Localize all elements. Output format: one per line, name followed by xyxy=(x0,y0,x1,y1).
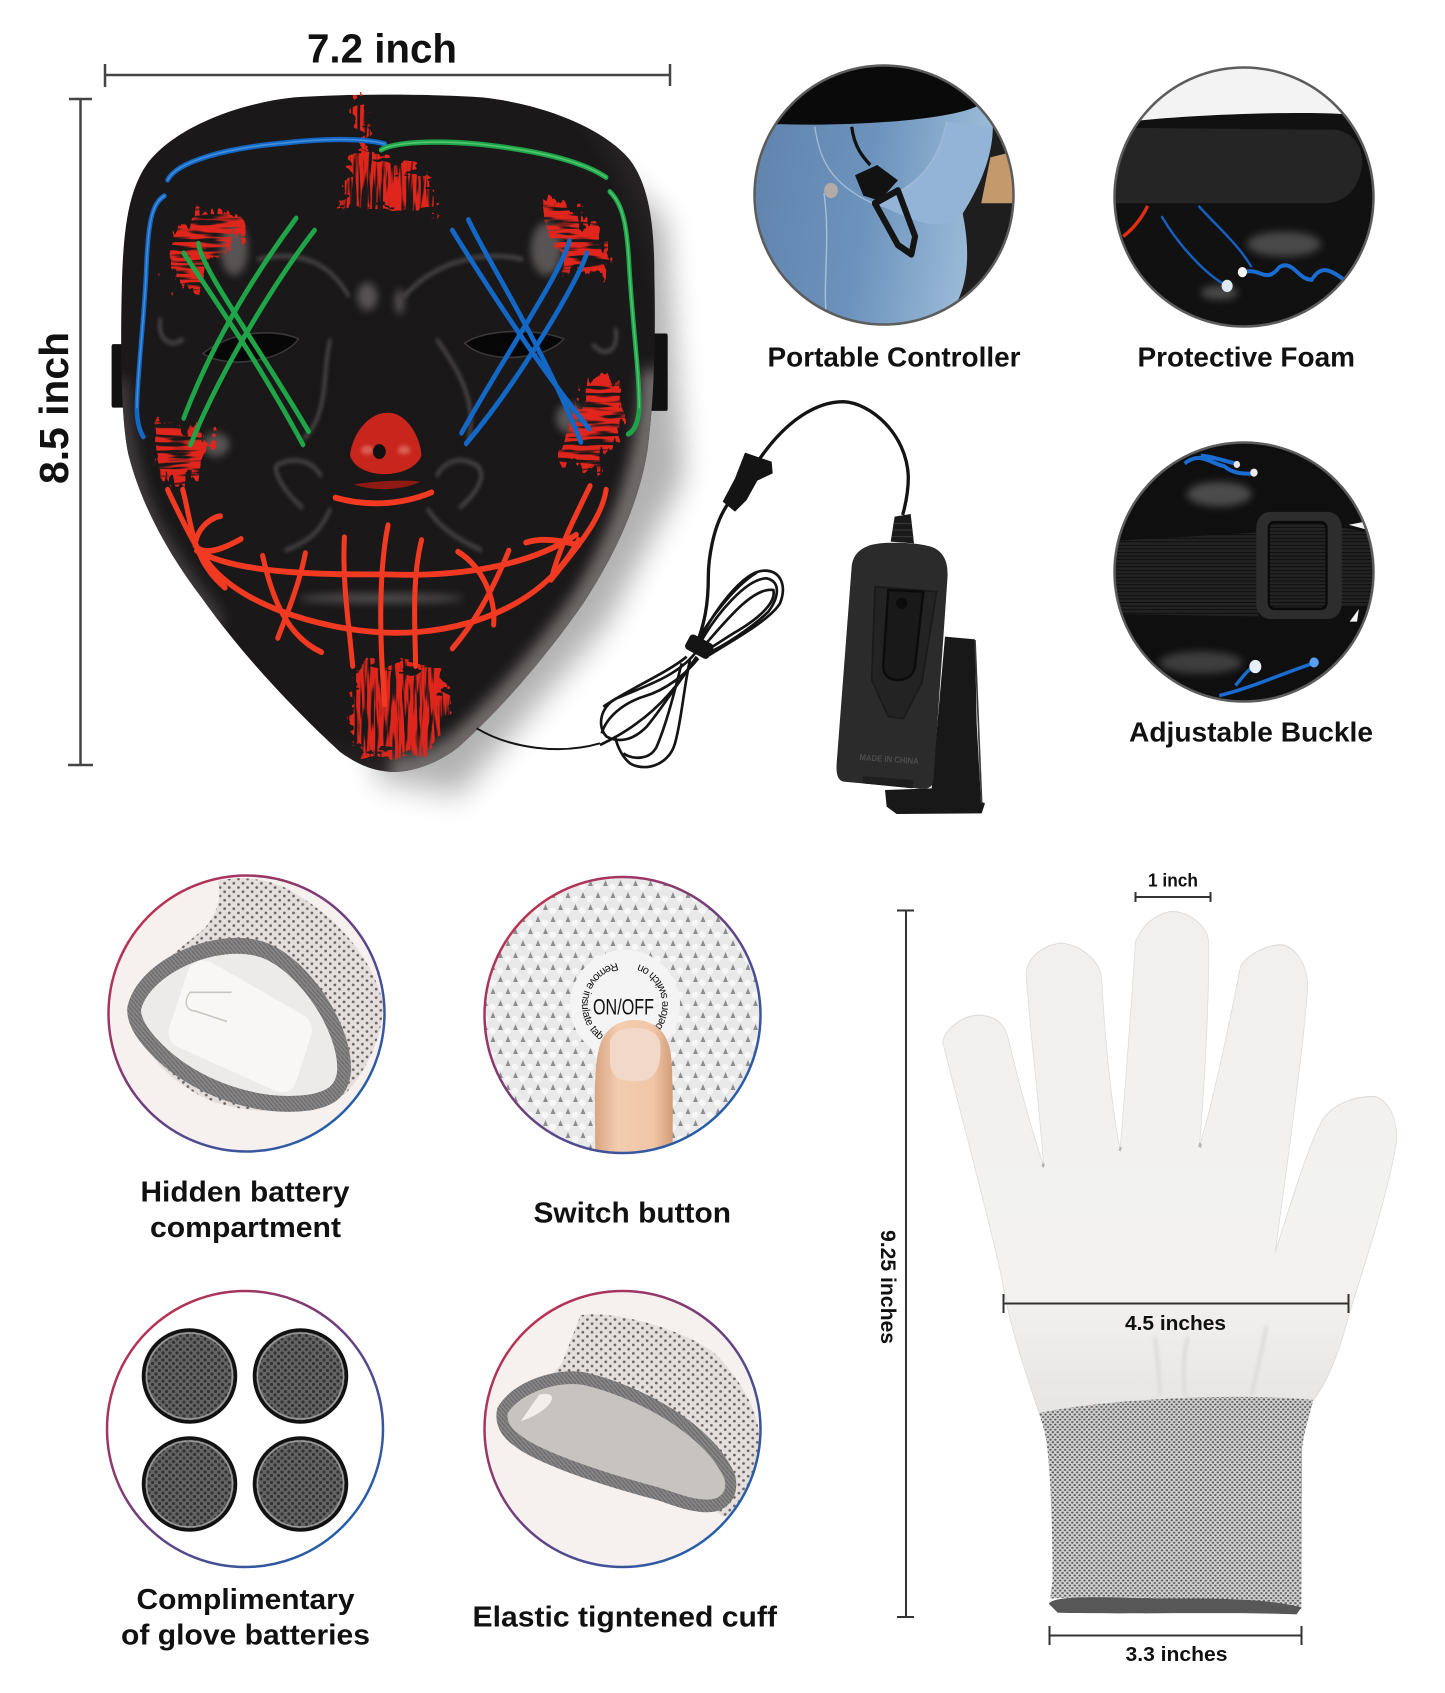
caption: compartment xyxy=(150,1212,341,1244)
red splatter paint xyxy=(152,101,625,754)
caption: Complimentary xyxy=(136,1584,354,1616)
controller body xyxy=(837,543,948,789)
connector plug xyxy=(723,453,773,512)
label: 8.5 inch: 8.5 inch xyxy=(31,332,77,484)
red mouth wire xyxy=(168,486,606,704)
battery cover xyxy=(885,637,985,814)
label: 7.2 inch: 7.2 inch xyxy=(307,26,457,72)
strain relief xyxy=(891,514,914,543)
palm width dimension xyxy=(1004,1294,1348,1335)
foam photo xyxy=(1116,69,1372,326)
lower coil loop xyxy=(600,653,698,767)
knit fabric with sticker and finger xyxy=(486,878,760,1152)
panel: switch button xyxy=(483,876,762,1230)
caption: Switch button xyxy=(534,1198,731,1230)
panel: elastic tightened cuff xyxy=(472,1284,777,1634)
label: 1 inch: 1 inch xyxy=(1148,870,1198,890)
caption: Portable Controller xyxy=(768,342,1021,372)
blue and green EL wire xyxy=(137,139,639,704)
made in china marking: MADE IN CHINA xyxy=(859,752,920,766)
glove cuff with battery box xyxy=(103,871,392,1156)
glove body and fingers xyxy=(943,911,1397,1413)
glove height dimension xyxy=(876,910,914,1617)
gray rim and gloss highlights xyxy=(122,222,654,772)
four coin cell batteries xyxy=(144,1330,346,1530)
caption: Adjustable Buckle xyxy=(1129,716,1373,748)
on/off sticker: ON/OFF xyxy=(593,994,654,1020)
upper coil loop xyxy=(695,571,783,657)
belt clip xyxy=(872,587,937,718)
eye holes xyxy=(203,333,298,362)
panel: protective foam xyxy=(1108,60,1386,373)
on/off sticker xyxy=(570,950,680,1052)
finger xyxy=(595,1020,673,1160)
panel: adjustable buckle xyxy=(1108,438,1386,748)
caption: Elastic tigntened cuff xyxy=(472,1602,777,1634)
label: 3.3 inches: 3.3 inches xyxy=(1126,1644,1228,1666)
caption: of glove batteries xyxy=(121,1620,370,1652)
wrist width dimension xyxy=(1050,1626,1302,1666)
panel: portable controller xyxy=(748,60,1021,373)
cuff photo xyxy=(486,1292,759,1566)
caption xyxy=(140,1176,350,1244)
label: 9.25 inches: 9.25 inches xyxy=(876,1230,899,1344)
mask height dimension xyxy=(31,99,93,765)
ribbed cuff xyxy=(1039,1397,1313,1609)
buckle photo xyxy=(1116,444,1372,700)
label: 4.5 inches: 4.5 inches xyxy=(1125,1313,1226,1335)
caption: Hidden battery xyxy=(140,1176,350,1208)
panel: complimentary glove batteries xyxy=(107,1291,383,1652)
mask width dimension xyxy=(105,26,670,87)
on/off sticker: Remove insulate tab xyxy=(582,962,618,1040)
finger width dimension xyxy=(1136,870,1210,902)
mask shell xyxy=(121,95,655,772)
caption: Protective Foam xyxy=(1138,342,1355,372)
panel: hidden battery compartment xyxy=(103,871,392,1244)
controller cable and coil xyxy=(477,402,908,767)
jeans photo xyxy=(756,66,1012,324)
caption xyxy=(121,1584,370,1652)
white knit glove xyxy=(943,911,1397,1614)
on/off sticker: before switch on xyxy=(638,964,668,1030)
LED purge mask xyxy=(112,95,684,794)
battery controller with belt clip xyxy=(837,514,985,814)
